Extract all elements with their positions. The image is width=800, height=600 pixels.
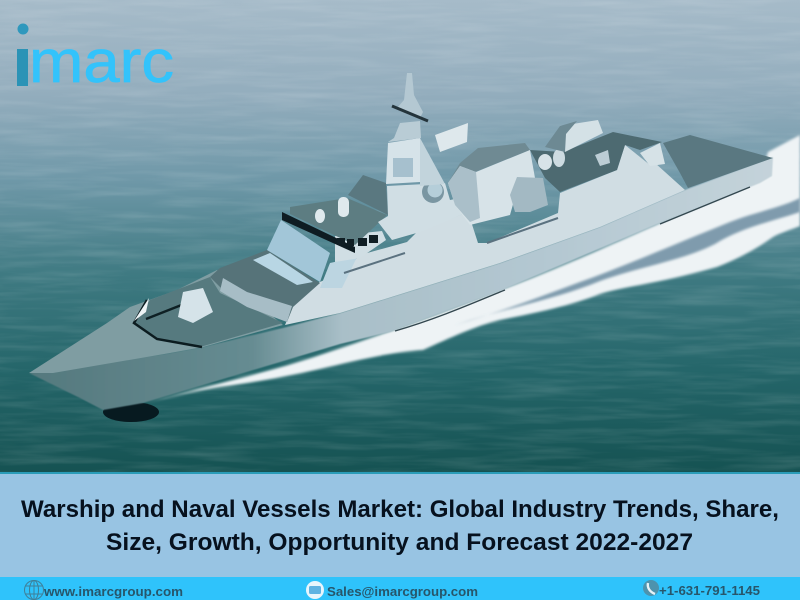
- title text: Warship and Naval Vessels Market: Global Industry Trends, Share,: [21, 496, 779, 523]
- tower wedge: [348, 175, 388, 215]
- foredeck: [29, 270, 283, 373]
- mid block: [448, 143, 530, 183]
- website: [24, 580, 183, 600]
- aft hangar: [560, 120, 603, 152]
- title text: Size, Growth, Opportunity and Forecast 2022-2027: [106, 529, 693, 556]
- bridge windows: [337, 235, 378, 246]
- waterline shadow: [395, 187, 750, 331]
- title panel: [0, 472, 800, 577]
- radar dome on tower: [422, 181, 444, 203]
- hull lower side: [29, 157, 773, 410]
- upper hull wall: [285, 145, 685, 325]
- title text: [21, 496, 779, 556]
- flight deck: [663, 135, 773, 188]
- icon: envelope: [306, 581, 324, 599]
- aft deck: [530, 132, 662, 192]
- bridge deck: [290, 198, 387, 245]
- phone: +1-631-791-1145: [659, 584, 760, 598]
- foredeck breakwater: [134, 298, 202, 347]
- bridge window band: [282, 212, 355, 253]
- phone: [643, 580, 760, 598]
- sea background: [0, 0, 800, 473]
- deck launcher: [253, 253, 313, 285]
- contact bar: [0, 577, 800, 600]
- small deck block: [595, 150, 610, 166]
- website: www.imarcgroup.com: [43, 584, 183, 599]
- hull stripe lines: [344, 218, 558, 273]
- mast: [388, 73, 428, 142]
- upper tower: [420, 138, 445, 186]
- radar panel: [435, 123, 468, 152]
- aft radar domes: [538, 154, 552, 170]
- bridge face: [267, 220, 330, 282]
- bow shadow on water: [103, 402, 159, 422]
- logo: imarc: marc: [29, 28, 174, 95]
- warship: [29, 73, 773, 422]
- forward deck house: [210, 250, 320, 322]
- aft block: [640, 143, 665, 166]
- domes on bridge deck: [315, 209, 325, 223]
- bridge frame: [335, 231, 386, 262]
- icon: globe: [24, 580, 44, 600]
- lower tower: [378, 183, 468, 240]
- icon: phone: [643, 580, 659, 596]
- ship wake: [143, 135, 800, 404]
- main gun: [146, 288, 213, 323]
- machinery cluster: [510, 177, 548, 212]
- email: Sales@imarcgroup.com: [327, 584, 478, 599]
